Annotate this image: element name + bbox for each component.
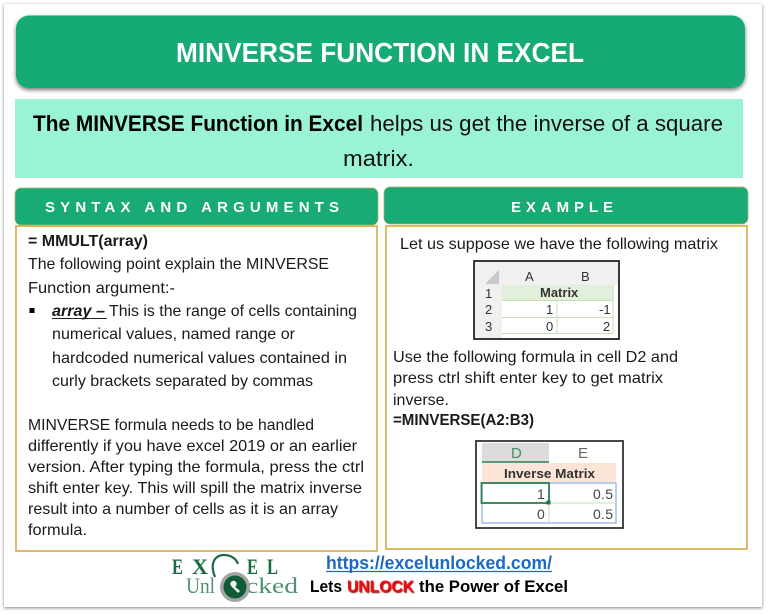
- argument intro: Function argument:-: [28, 280, 175, 297]
- tagline: Lets: [310, 578, 342, 596]
- formula note: version. After typing the formula, press the ctrl: [28, 459, 364, 476]
- argument bullet: numerical values, named range or: [52, 326, 296, 343]
- argument bullet: hardcoded numerical values contained in: [52, 350, 347, 367]
- argument bullet: curly brackets separated by commas: [52, 373, 313, 390]
- formula instructions: [393, 349, 678, 409]
- formula note: formula.: [28, 522, 87, 539]
- argument bullet: array –: [52, 303, 105, 320]
- tagline: the Power of Excel: [419, 578, 568, 596]
- logo: Excel Unlocked: E: [172, 554, 183, 579]
- heading: example: EXAMPLE: [511, 199, 613, 216]
- argument intro: [28, 256, 329, 297]
- example intro: Let us suppose we have the following matrix: [400, 236, 718, 253]
- tagline: UNLOCK: [348, 579, 415, 597]
- heading: syntax and arguments: SYNTAX AND ARGUMENTS: [45, 199, 339, 216]
- table: inverse matrix: E: [578, 445, 588, 462]
- table: inverse matrix: D: [511, 445, 522, 462]
- table: matrix: 2: [603, 319, 610, 334]
- table: matrix: 1: [546, 302, 553, 317]
- table: matrix: A: [525, 269, 534, 284]
- logo: Excel Unlocked: L: [267, 554, 278, 579]
- table: matrix: 3: [485, 319, 492, 334]
- panel: intro definition: The MINVERSE Function in Excel: [33, 111, 363, 136]
- formula note: result into a number of cells as it is an array: [28, 501, 338, 518]
- table: inverse matrix: Inverse Matrix: [504, 466, 596, 481]
- formula note: [28, 417, 364, 539]
- tagline: UNLOCK: [347, 578, 414, 596]
- table: inverse matrix: 0.5: [593, 506, 613, 522]
- panel: example: [386, 226, 747, 549]
- table: matrix: Matrix: [540, 285, 579, 300]
- table: matrix: -1: [599, 302, 611, 317]
- title banner: [16, 16, 745, 88]
- table: matrix: [474, 261, 619, 339]
- argument bullet: [30, 303, 357, 390]
- title text: MINVERSE FUNCTION IN EXCEL: [176, 37, 584, 68]
- formula note: shift enter key. This will spill the matrix inverse: [28, 480, 362, 497]
- formula note: MINVERSE formula needs to be handled: [28, 417, 314, 434]
- formula instructions: press ctrl shift enter key to get matrix: [393, 370, 663, 387]
- logo: Excel Unlocked: Unl: [186, 573, 215, 598]
- formula instructions: inverse.: [393, 392, 449, 409]
- table: inverse matrix: 0: [537, 506, 545, 522]
- formula note: differently if you have excel 2019 or an earlier: [28, 438, 358, 455]
- table: inverse matrix: [476, 441, 623, 528]
- panel: syntax and arguments: [16, 226, 377, 551]
- table: matrix: 0: [546, 319, 553, 334]
- website link: https://excelunlocked.com/: [326, 553, 552, 573]
- formula instructions: Use the following formula in cell D2 and: [393, 349, 678, 366]
- argument intro: The following point explain the MINVERSE: [28, 256, 329, 273]
- logo: Excel Unlocked: X: [192, 554, 208, 579]
- tagline: [310, 578, 568, 597]
- panel: intro definition: [15, 99, 743, 178]
- table: matrix: B: [581, 269, 590, 284]
- heading: example: [384, 187, 748, 224]
- panel: intro definition: helps us get the inverse of a square: [370, 111, 723, 136]
- logo: Excel Unlocked: E: [247, 554, 258, 579]
- argument bullet: This is the range of cells containing: [109, 303, 357, 320]
- table: matrix: 1: [485, 286, 492, 301]
- panel: intro definition: matrix.: [343, 146, 414, 171]
- heading: syntax and arguments: [15, 188, 378, 225]
- formula: =MINVERSE(A2:B3): [393, 412, 534, 429]
- syntax formula: = MMULT(array): [28, 233, 148, 250]
- table: inverse matrix: 1: [537, 486, 545, 502]
- table: matrix: 2: [485, 302, 492, 317]
- logo: Excel Unlocked: cked: [246, 573, 298, 598]
- logo: Excel Unlocked: [172, 554, 298, 602]
- table: inverse matrix: 0.5: [593, 486, 613, 502]
